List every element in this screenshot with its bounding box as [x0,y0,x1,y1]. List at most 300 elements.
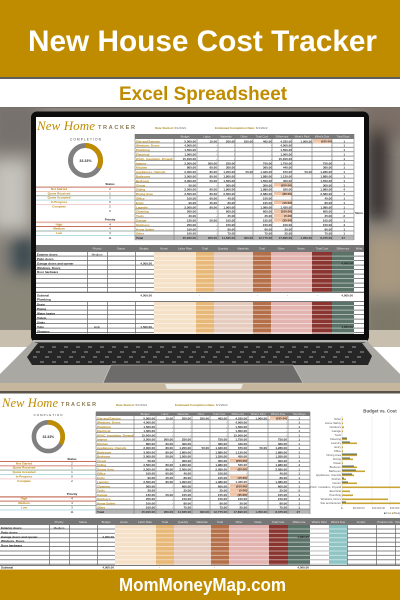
lower budget summary table: 40.00 [183,472,191,476]
budget summary table: 200.00 [226,139,235,143]
lower budget summary table: 300.00 [182,459,191,463]
chart legend [384,511,400,515]
lower budget summary table: 2,000.00 [143,446,155,450]
budget summary table: 4,000.00 [280,144,292,148]
lower budget summary table: 15,000.00 [234,433,247,437]
lower budget summary table: 4,000.00 [143,420,155,424]
lower budget summary table: Plumbing [97,425,111,429]
budget summary table: 1,050.00 [300,236,312,240]
website url: MomMoneyMap.com [119,575,286,595]
budget summary table: 75.00 [227,232,235,236]
lower budget summary table: 80.00 [219,501,227,505]
cost detail table: 4,000.00 [140,294,152,298]
cost detail table: - [287,294,288,298]
budget summary table: (100.00) [281,210,292,214]
budget summary table: 150.00 [323,223,332,227]
budget summary table: Siding [136,188,145,192]
lower budget summary table: 500.00 [164,438,173,442]
lower budget summary table: Other [97,506,106,510]
cost detail table: Subtotal [37,294,49,298]
cost detail table: Sinks [37,320,45,324]
budget summary table: Materials [220,135,232,139]
lower budget summary table: (535.00) [276,416,287,420]
cost detail table: High [94,325,100,329]
lower budget summary table: - [172,484,173,488]
budget summary table: 1,880.00 [260,174,272,178]
budget summary table: 1,420.00 [280,205,292,209]
lower priority table: 4 [71,497,73,501]
lower budget summary table: Entry [97,476,105,480]
lower budget summary table: 1 [298,425,300,429]
lower budget summary table: 1 [298,480,300,484]
lower budget summary table: 1,880.00 [275,450,287,454]
budget summary table: 2,500.00 [223,192,235,196]
budget summary table: (15.00) [282,201,292,205]
lower budget summary table: 50.00 [259,446,267,450]
budget summary table: Garage [136,218,147,222]
lower budget summary table: 360.00 [218,442,227,446]
budget summary table: 1,500.00 [280,148,292,152]
budget summary table: 250.00 [244,139,253,143]
lower budget summary table: - [190,420,191,424]
lower cost detail table: Total Cost [272,520,284,524]
budget summary table: 2,500.00 [184,192,196,196]
budget summary table: 100.00 [187,196,196,200]
lower budget summary table: (80.00) [237,467,247,471]
cost detail table: Garage doors and opener [37,262,74,266]
lower budget summary table: 4 [298,497,300,501]
budget summary table: 1,500.00 [184,148,196,152]
lower budget summary table: 250.00 [182,438,191,442]
lower budget summary table: What's Due [271,412,286,416]
lower budget summary table: 3,000.00 [143,450,155,454]
lower cost detail table: Other [236,520,243,524]
cost detail table: Drain [37,302,45,306]
budget summary table: 800.00 [187,166,196,170]
budget summary table: 40.00 [324,196,332,200]
lower budget summary table: 1,500.00 [179,454,191,458]
cost detail table: Priority [93,246,102,250]
lower budget summary table: 80.00 [165,463,173,467]
lower budget summary table: 1,120.00 [235,450,247,454]
budget summary table: 60.00 [209,196,217,200]
lower budget summary table: 50.00 [165,493,173,497]
budget summary table: - [216,232,217,236]
lower budget summary table: - [226,420,227,424]
budget summary table: 80.00 [209,205,217,209]
lower budget summary table: Appliances, Utensils [97,446,127,450]
lower budget summary table: - [286,433,287,437]
lower sheet heading: Estimated Completion Date: 6/1/2022 [175,403,228,407]
budget summary table: HVAC, Insulation, Drywall [136,157,173,161]
budget summary table: 75.00 [264,232,272,236]
lower budget summary table: - [286,429,287,433]
cost detail table: Patio doors [37,257,54,261]
budget vs cost bar chart [309,408,400,515]
cost detail table: Plumbing [37,298,51,302]
lower budget summary table: Garage [97,493,108,497]
cost detail table: Piping [37,307,46,311]
lower budget summary table: 800.00 [146,442,155,446]
lower budget summary table: - [226,425,227,429]
lower status table: Complete [17,479,31,483]
lower budget summary table: 1 [298,506,300,510]
lower budget summary table: 25.00 [165,476,173,480]
lower budget summary table: 150.00 [218,497,227,501]
lower budget summary table: 1,980.00 [215,463,227,467]
lower budget summary table: Laundry [97,480,109,484]
lower budget summary table: 1 [298,467,300,471]
budget summary table: 1 [343,196,345,200]
lower budget summary table: 90.00 [147,476,155,480]
lower budget summary table: 1 [298,493,300,497]
budget summary table: Difference [276,135,289,139]
lower budget summary table: - [172,425,173,429]
budget summary table: 2,000.00 [184,170,196,174]
cost detail table: Toilets [37,316,47,320]
budget summary table: (250.00) [281,183,292,187]
budget summary table: 50.00 [245,170,253,174]
budget summary table [135,134,363,240]
lower cost detail table: Hours [120,520,128,524]
lower budget summary table: 4,535.00 [235,416,247,420]
sheet heading: Date Started: 6/1/2021 [155,126,187,130]
budget vs cost bar chart: Bedroom [330,465,342,469]
budget summary table: Total Days [336,135,350,139]
budget vs cost bar chart: $5,000.00 [353,506,365,510]
budget vs cost bar chart: Outdoors [329,425,342,429]
cost detail table: Total [259,246,265,250]
budget summary table: Tools [136,214,144,218]
cost detail table: 4,000.00 [140,262,152,266]
lower completion donut [34,413,63,451]
sheet heading: Estimated Completion Date: 6/1/2022 [215,126,268,130]
lower budget summary table: 1,900.00 [179,463,191,467]
lower budget summary table: 80.00 [183,501,191,505]
budget summary table: 60.00 [209,166,217,170]
budget summary table: Total Cost [256,135,268,139]
lower budget summary table: 60.00 [165,472,173,476]
budget summary table: - [331,157,332,161]
lower budget summary table: 1,750.00 [235,438,247,442]
completion donut [70,138,102,176]
lower budget summary table: - [172,488,173,492]
cost detail table: Showers [37,330,50,334]
budget summary table: 155.00 [263,218,272,222]
budget summary table: 1,000.00 [300,139,312,143]
lower priority table [0,492,96,514]
lower budget summary table: 1,550.00 [275,454,287,458]
budget vs cost bar chart: Kitchen [332,477,341,481]
budget summary table: 2,500.00 [184,161,196,165]
lower budget summary table: 1 [298,416,300,420]
lower priority table: Priority [67,492,78,496]
budget vs cost bar chart: Other [334,417,341,421]
lower budget summary table: 5,000.00 [143,416,155,420]
budget summary table: 100.00 [283,223,292,227]
status table: Not Started [51,187,67,191]
budget summary table: 80.00 [209,188,217,192]
lower budget summary table: 1 [298,476,300,480]
lower budget summary table: 300.00 [200,510,209,514]
budget summary table: Total [136,236,143,240]
budget summary table: 1,280.00 [320,170,332,174]
budget summary table: 250.00 [187,223,196,227]
budget summary table: 27 [342,236,345,240]
sheet heading [36,118,268,133]
lower budget summary table: 1,500.00 [143,425,155,429]
budget summary table: 40.00 [227,196,235,200]
budget summary table: 100.00 [187,232,196,236]
cost detail table: Door hardware [37,270,59,274]
budget summary table: What's Paid [295,135,310,139]
budget summary table: Electrical [136,152,150,156]
lower cost detail table: 4,000.00 [297,566,309,570]
budget summary table: 1,120.00 [280,174,292,178]
lower budget summary table: 105.00 [182,493,191,497]
budget vs cost bar chart: $10,000.00 [372,506,386,510]
budget summary table: 90.00 [188,201,196,205]
laptop base [0,341,400,394]
lower priority table: Low [21,505,28,509]
cost detail table: Quantity [218,246,229,250]
budget summary table: 1,080.00 [260,205,272,209]
lower budget summary table: - [190,429,191,433]
lower budget summary table: 2,500.00 [143,438,155,442]
lower budget summary table: 120.00 [146,493,155,497]
budget summary table: 4 [343,188,345,192]
status table: Status [105,182,115,186]
lower budget summary table: - [172,497,173,501]
priority table: 11 [108,236,112,240]
budget summary table: - [271,144,272,148]
lower cost detail table: Budget [102,520,111,524]
budget vs cost bar chart: Bathroom [329,469,342,473]
budget vs cost bar chart: Office [334,449,341,453]
lower status table: 2 [71,479,73,483]
budget summary table: 440.00 [283,166,292,170]
lower budget summary table: 1 [298,433,300,437]
cost detail table: Budget [140,246,149,250]
cost detail table: Materials [237,246,249,250]
budget vs cost bar chart: Home Safety [325,421,342,425]
lower spreadsheet [0,396,400,570]
lower budget summary table: 450.00 [238,454,247,458]
budget vs cost bar chart: $- [341,506,343,510]
lower budget summary table: 360.00 [278,442,287,446]
lower budget summary table: Dining Area [97,467,114,471]
budget summary table: 300.00 [226,166,235,170]
budget summary table: 80.00 [324,227,332,231]
footer band [0,570,400,600]
budget summary table: - [216,152,217,156]
budget summary table: 300.00 [263,183,272,187]
budget vs cost bar chart: $15,000 [390,506,400,510]
lower budget summary table: 1,280.00 [275,446,287,450]
budget summary table: 20.00 [188,214,196,218]
budget summary table: 750.00 [263,161,272,165]
lower budget summary table: Tools [97,488,105,492]
lower cost detail table: Total [162,520,168,524]
lower budget summary table: Materials [177,412,189,416]
lower budget summary table: What's Paid [251,412,266,416]
lower cost detail table: Priority [55,520,64,524]
lower cost detail table: Windows, Doors [1,539,25,543]
budget summary table: 80.00 [209,170,217,174]
budget summary table: 1 [343,152,345,156]
budget vs cost bar chart: Cleaning [330,437,341,441]
budget summary table: 80.00 [227,201,235,205]
lower cost detail table: Medium [54,526,65,530]
cost detail table: 1,500.00 [341,325,353,329]
budget summary table: 1 [343,205,345,209]
budget summary table: - [271,148,272,152]
cost detail table: Other [278,246,285,250]
budget summary table: 1 [343,170,345,174]
lower budget summary table: 1,000.00 [255,416,267,420]
budget summary table: Outdoors [136,223,150,227]
status table [36,182,135,213]
budget summary table: 50.00 [304,170,312,174]
cost detail table: Tubs [37,325,44,329]
lower budget summary table: 2,580.00 [275,467,287,471]
budget summary table: 1,330.00 [260,170,272,174]
lower budget summary table: 1,050.00 [255,510,267,514]
lower budget summary table: - [190,433,191,437]
cost detail table: Difference [337,246,350,250]
cost detail table: Windows, Doors [37,266,61,270]
lower cost detail table: Exterior doors [1,526,22,530]
budget summary table: 11,525.00 [222,236,235,240]
budget summary table: 120.00 [187,218,196,222]
status table: Quote Accepted [48,196,71,200]
budget summary table: 1 [343,179,345,183]
lower status table: Quote Received [13,466,35,470]
budget summary table: 25.00 [209,201,217,205]
budget summary table: 105.00 [263,201,272,205]
budget summary table: 2,500.00 [184,205,196,209]
budget summary table: 12,775.00 [259,236,272,240]
budget vs cost bar chart: Closet [333,461,341,465]
lower cost detail table: What's Due [331,520,346,524]
lower sheet heading: New Home [1,396,58,410]
budget summary table: Laundry [136,205,148,209]
lower budget summary table: 1 [298,484,300,488]
budget summary table: - [216,144,217,148]
lower sheet heading [1,396,228,410]
lower budget summary table: 150.00 [278,497,287,501]
lower cost detail table: What's Paid [312,520,327,524]
lower budget summary table: 80.00 [165,480,173,484]
budget summary table: 80.00 [209,174,217,178]
lower cost detail table: - [214,566,215,570]
budget summary table: 25.00 [264,214,272,218]
budget summary table: Plumbing [136,148,150,152]
lower budget summary table: Site and Exterior [97,416,122,420]
budget summary table: 1 [343,174,345,178]
lower budget summary table: 40.00 [279,472,287,476]
status table: In Progress [51,200,68,204]
completion donut: 33.33% [79,159,92,163]
budget summary table: - [216,210,217,214]
lower cost detail table: - [159,566,160,570]
lower budget summary table: Interior [97,438,108,442]
lower budget summary table: Total Days [292,412,306,416]
budget summary table: 105.00 [323,218,332,222]
budget summary table: 600.00 [263,210,272,214]
budget summary table: Interior [136,161,147,165]
lower budget summary table: - [172,459,173,463]
lower budget summary table: 80.00 [165,450,173,454]
budget summary table: 100.00 [263,196,272,200]
budget summary table: 1 [343,139,345,143]
lower budget summary table: 1,000.00 [143,429,155,433]
lower cost detail table: Garage doors and opener [1,535,38,539]
budget summary table: - [234,148,235,152]
budget vs cost bar chart: Budget vs. Cost [363,408,397,414]
background photo [0,100,400,350]
lower budget summary table: - [190,425,191,429]
lower completion donut: 33.33% [43,435,54,439]
lower budget summary table: 2,500.00 [143,480,155,484]
budget summary table: 1 [343,144,345,148]
budget summary table: 360.00 [263,166,272,170]
lower budget summary table: HVAC, Insulation, Drywall [97,433,134,437]
budget summary table: Cleaning [136,210,149,214]
budget summary table: 2,580.00 [260,192,272,196]
lower budget summary table: - [172,501,173,505]
lower cost detail table: Quantity [178,520,189,524]
top banner [0,0,400,79]
status table: 2 [109,204,111,208]
laptop [0,112,400,394]
lower budget summary table: 50.00 [147,459,155,463]
budget summary table: (5.00) [284,214,292,218]
lower cost detail table: Labor Rate [138,520,152,524]
lower budget summary table: 50.00 [201,446,209,450]
lower cost detail table: Materials [196,520,208,524]
lower budget summary table: 500.00 [146,484,155,488]
budget summary table: 15,000.00 [183,157,196,161]
budget summary table: Menu [355,211,363,215]
budget summary table: 50.00 [209,218,217,222]
lower budget summary table: 15.00 [165,416,173,420]
status table: 1 [109,191,111,195]
lower cost detail table: Notes [254,520,262,524]
priority table: 4 [109,226,111,230]
spreadsheet on laptop [36,118,364,334]
budget summary table: Dining Area [136,192,153,196]
budget summary table: 25.00 [324,214,332,218]
cost detail table: Notes [297,246,305,250]
budget summary table: 1,550.00 [320,179,332,183]
budget summary table: 1,550.00 [260,179,272,183]
budget summary table: 1,980.00 [320,188,332,192]
budget vs cost bar chart: Interior [332,481,341,485]
budget summary table: - [271,152,272,156]
lower priority table: High [21,497,27,501]
budget summary table: 520.00 [283,188,292,192]
sheet heading: TRACKER [98,125,135,131]
lower budget summary table: Home Safety [97,501,116,505]
budget summary table: 15.00 [209,139,217,143]
budget summary table: 1,900.00 [223,188,235,192]
lower status table: 2 [71,462,73,466]
status table: Complete [52,204,66,208]
budget summary table: Other [240,135,248,139]
budget summary table: - [216,183,217,187]
lower budget summary table: Difference [232,412,245,416]
